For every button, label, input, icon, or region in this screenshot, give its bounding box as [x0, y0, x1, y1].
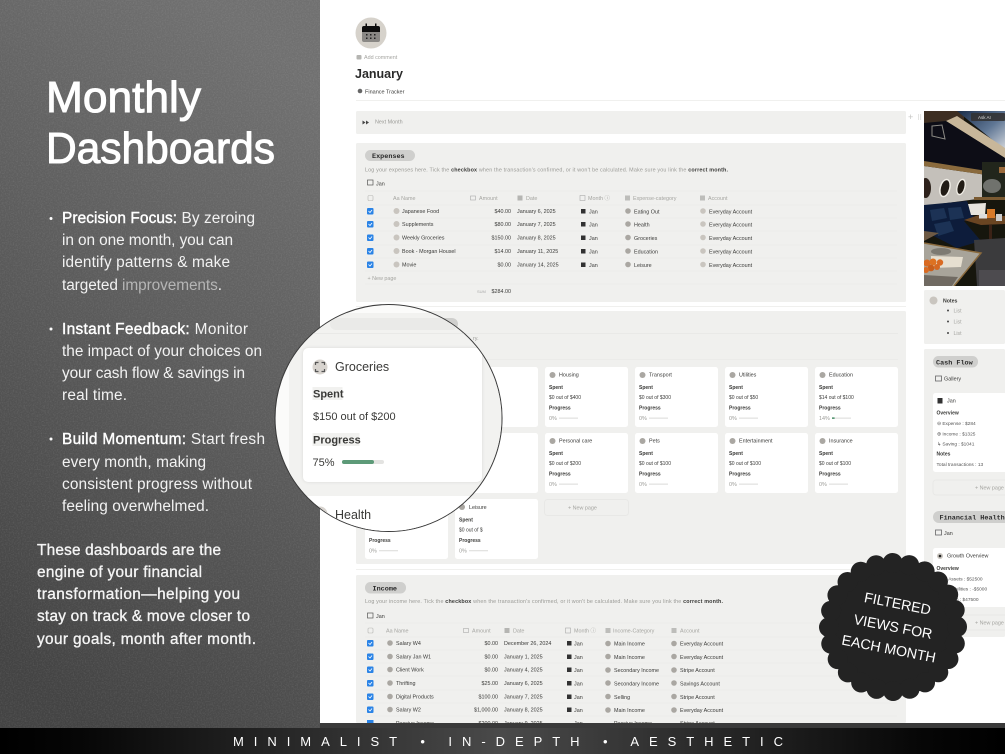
card: housing: Housing: [559, 372, 579, 378]
enlarged card: groceries: Progress: [313, 434, 361, 446]
panel: notes: [924, 290, 1005, 344]
panel: notes: Notes: [943, 298, 958, 304]
card: growth overview: Net Worth : $47500: [937, 597, 979, 603]
table header: Aa Name: [386, 628, 408, 634]
card: insurance: [815, 433, 898, 493]
section pill, mostly behind magnifier: [365, 318, 458, 330]
card: utilities: Progress: [729, 406, 751, 412]
income rows: Selling: [614, 695, 630, 701]
badge: filtered views for each month: EACH MONTH: [840, 633, 937, 667]
expense rows: Japanese Food: [402, 209, 439, 215]
expense rows: Supplements: [402, 222, 434, 228]
expense rows: Groceries: [634, 236, 658, 242]
title: [46, 73, 275, 173]
card: housing: Progress: [549, 406, 571, 412]
income rows: Secondary Income: [614, 682, 659, 688]
card: utilities: [725, 367, 808, 427]
footer banner: MINIMALIST • IN-DEPTH • AESTHETIC: [233, 734, 783, 749]
bullet: build momentum: Build Momentum: Start fresh: [62, 431, 265, 448]
enlarged card: groceries: Spent: [313, 388, 344, 400]
table header: Account: [680, 628, 700, 634]
enlarged card: groceries: $150 out of $200: [313, 411, 396, 423]
card: january cash flow: Notes: [936, 452, 951, 458]
card: personal care: Personal care: [559, 438, 592, 444]
card: leisure: 0%: [459, 548, 467, 554]
income rows: Jan: [574, 668, 583, 674]
pill: cash flow: Cash Flow: [936, 360, 974, 368]
card: pets: Spent: [639, 451, 653, 457]
expense rows: Everyday Account: [709, 210, 753, 216]
new page card: [933, 480, 1005, 495]
expense rows: Eating Out: [634, 210, 660, 216]
closing paragraph: These dashboards are the: [37, 542, 221, 559]
card: education: Education: [829, 372, 853, 378]
card: personal care: [545, 433, 628, 493]
table header: [368, 194, 728, 202]
expense rows: Jan: [589, 250, 598, 256]
income rows: January 7, 2025: [504, 694, 543, 700]
income rows: $0.00: [484, 641, 498, 647]
card: pets: $0 out of $100: [639, 461, 671, 467]
new page card: + New page: [568, 506, 597, 512]
card: pets: Progress: [639, 472, 661, 478]
new page card: [544, 500, 628, 516]
income rows: Thrifting: [396, 681, 415, 687]
panel: income: [356, 575, 906, 727]
bullet: instant feedback: the impact of your choices on: [62, 343, 262, 360]
pill: financial health: Financial Health: [940, 514, 1005, 522]
income rows: Passive Income: [614, 721, 652, 727]
enlarged card: groceries: [303, 348, 482, 482]
expense rows: Education: [634, 250, 658, 256]
title: Dashboards: [46, 124, 275, 173]
closing paragraph: [37, 542, 256, 648]
pill: expenses: [365, 150, 415, 161]
panel: notes: List: [954, 320, 962, 326]
expense rows: $14.00: [494, 249, 511, 255]
card: education: 14%: [819, 416, 830, 422]
income rows: Main Income: [614, 642, 645, 648]
income rows: December 26, 2024: [504, 641, 551, 647]
sum: SUM: [477, 289, 486, 294]
income rows: Jan: [574, 721, 583, 727]
card: education: Spent: [819, 385, 833, 391]
card: entertainment: Entertainment: [739, 438, 773, 444]
card: utilities: Utilities: [739, 372, 757, 378]
table header: Amount: [472, 628, 491, 634]
expense rows: Jan: [589, 222, 598, 228]
expense rows: Jan: [589, 210, 598, 216]
card blanks behind magnifier: [365, 367, 538, 493]
finance tracker link: Finance Tracker: [365, 90, 405, 96]
footer banner: [0, 728, 1005, 754]
income rows: January 8, 2025: [504, 708, 543, 714]
expense rows: January 11, 2025: [517, 249, 558, 255]
sum: [477, 289, 511, 295]
card: personal care: $0 out of $200: [549, 461, 581, 467]
table header: Aa Name: [393, 196, 415, 202]
card: pets: [635, 433, 718, 493]
view tab: Jan: [376, 182, 385, 188]
expense rows: Weekly Groceries: [402, 236, 445, 242]
card: pets: 0%: [639, 482, 647, 488]
card: transport: Transport: [649, 372, 672, 378]
pill: income: Income: [372, 586, 397, 594]
card: personal care: Spent: [549, 451, 563, 457]
enlarged card: groceries: Groceries: [335, 360, 389, 374]
income rows: Everyday Account: [680, 708, 724, 714]
card: insurance: 0%: [819, 482, 827, 488]
expense rows: Jan: [589, 236, 598, 242]
card: housing: Spent: [549, 385, 563, 391]
card: leisure: Leisure: [469, 505, 487, 511]
income rows: January 4, 2025: [504, 668, 543, 674]
expense rows: January 6, 2025: [517, 209, 556, 215]
gallery tab: Gallery: [944, 376, 961, 382]
card: utilities: $0 out of $50: [729, 395, 758, 401]
card: entertainment: Progress: [729, 472, 751, 478]
panel: notes: List: [954, 331, 962, 337]
closing paragraph: engine of your financial: [37, 564, 202, 581]
income rows: Passive Income: [396, 721, 434, 727]
bullet: precision focus: in on one month, you can: [62, 232, 233, 249]
panel: expenses: [356, 143, 906, 302]
card: housing: [545, 367, 628, 427]
panel: notes: List: [954, 308, 962, 314]
expense rows: Everyday Account: [709, 222, 753, 228]
bullet: precision focus: identify patterns & make: [62, 254, 230, 271]
income rows: [367, 640, 724, 727]
bullet: build momentum: feeling overwhelmed.: [62, 498, 209, 515]
income rows: Salary Jan W1: [396, 654, 431, 660]
bullet: instant feedback: your cash flow & savings in: [62, 365, 245, 382]
income rows: Client Work: [396, 668, 424, 674]
next month bar: Next Month: [375, 120, 403, 126]
closing paragraph: stay on track & move closer to: [37, 608, 250, 625]
page icon: calendar: [356, 18, 386, 48]
expense rows: Everyday Account: [709, 250, 753, 256]
next month bar: +: [908, 112, 913, 122]
card: utilities: Spent: [729, 385, 743, 391]
income rows: $200.00: [478, 721, 498, 727]
pill: cash flow: [933, 356, 978, 368]
card: entertainment: [725, 433, 808, 493]
income rows: Everyday Account: [680, 642, 724, 648]
income rows: Salary W4: [396, 641, 421, 647]
card: leisure: Spent: [459, 518, 473, 524]
card: transport: Spent: [639, 385, 653, 391]
card: leisure: [455, 499, 538, 559]
table header: Month ⓘ: [588, 194, 610, 202]
enlarged card: health: Health: [335, 508, 371, 522]
income rows: January 9, 2025: [504, 721, 543, 727]
instruction text: Log your income here. Tick the checkbox when the transaction's confirmed, or it won't be calculated. Make sure you link the correct month.: [365, 599, 724, 605]
new page card: [933, 615, 1005, 630]
expense rows: January 14, 2025: [517, 262, 559, 268]
table header: Date: [513, 628, 524, 634]
card: education: Progress: [819, 406, 841, 412]
new page card: + New page: [975, 620, 1004, 626]
badge: filtered views for each month: VIEWS FOR: [852, 612, 934, 643]
table header: Expense-category: [633, 196, 677, 202]
expense rows: Leisure: [634, 263, 652, 269]
income rows: Digital Products: [396, 694, 434, 700]
panel: budget categories: [356, 311, 906, 564]
bullet: instant feedback: real time.: [62, 387, 127, 404]
view tab: Jan: [944, 531, 953, 537]
expense rows: January 8, 2025: [517, 236, 556, 242]
card: january cash flow: ⊕ Income : $1325: [937, 432, 976, 438]
income rows: Jan: [574, 682, 583, 688]
page title: January: January: [355, 67, 403, 81]
next month bar: [356, 111, 922, 134]
card: growth overview: Total Assets : $52500: [937, 576, 983, 582]
new page row: + New page: [368, 276, 396, 282]
card: housing: 0%: [549, 416, 557, 422]
card: transport: Progress: [639, 406, 661, 412]
card: january cash flow: Overview: [936, 410, 959, 416]
badge: filtered views for each month: [824, 558, 962, 696]
expense rows: $40.00: [494, 209, 511, 215]
card: entertainment: $0 out of $100: [729, 461, 761, 467]
bullet: build momentum: consistent progress without: [62, 476, 253, 493]
income rows: Main Income: [614, 708, 645, 714]
card: insurance: Progress: [819, 472, 841, 478]
expense rows: $0.00: [498, 262, 511, 268]
table header: Income-Category: [613, 628, 655, 634]
card: january cash flow: ⊖ Expense : $284: [937, 421, 976, 427]
card: personal care: Progress: [549, 472, 571, 478]
badge: filtered views for each month: FILTERED: [863, 590, 932, 619]
pill: expenses: Expenses: [372, 153, 405, 161]
gallery tab: [936, 376, 961, 382]
card: pets: Pets: [649, 438, 660, 444]
instruction text: Log your expenses here. Tick the checkbox when the transaction's confirmed, or it won't be calculated. Make sure you link the correct month.: [365, 168, 728, 174]
card: health: Progress: [369, 538, 391, 544]
card: transport: $0 out of $300: [639, 395, 671, 401]
income rows: $25.00: [482, 681, 498, 687]
title: Monthly: [46, 73, 201, 122]
table header: [368, 626, 700, 634]
expense rows: Everyday Account: [709, 236, 753, 242]
card: january cash flow: Jan: [947, 398, 956, 404]
expense rows: Book - Morgan Housel: [402, 249, 456, 255]
table header: Month ⓘ: [574, 626, 596, 634]
card: education: [815, 367, 898, 427]
enlarged card: groceries: 75%: [312, 457, 335, 469]
income rows: $0.00: [484, 654, 498, 660]
expense rows: [367, 208, 753, 269]
expense rows: $80.00: [494, 222, 511, 228]
card: january cash flow: Total transactions : 13: [936, 462, 983, 468]
section description tail: ry.: [473, 336, 479, 342]
card: education: $14 out of $100: [819, 395, 854, 401]
closing paragraph: your goals, month after month.: [37, 631, 256, 648]
card: health: [365, 499, 448, 559]
card: insurance: Insurance: [829, 438, 853, 444]
income rows: January 6, 2025: [504, 681, 543, 687]
income rows: Jan: [574, 655, 583, 661]
income rows: January 1, 2025: [504, 654, 543, 660]
bullet: instant feedback: Instant Feedback: Monitor: [62, 321, 248, 338]
card: growth overview: Growth Overview: [947, 554, 988, 560]
income rows: Salary W2: [396, 708, 421, 714]
view tab: [368, 613, 385, 620]
income rows: Savings Account: [680, 682, 720, 688]
bullet: precision focus: targeted improvements.: [62, 277, 222, 294]
sum: $284.00: [492, 289, 511, 295]
income rows: $0.00: [484, 668, 498, 674]
card: growth overview: [933, 548, 1005, 607]
card: leisure: $0 out of $: [459, 528, 483, 534]
expense rows: January 7, 2025: [517, 222, 556, 228]
bullet: build momentum: [50, 431, 265, 515]
bullet: precision focus: [50, 210, 255, 294]
new page card: + New page: [975, 486, 1004, 492]
bullet: precision focus: Precision Focus: By zeroing: [62, 210, 255, 227]
magnifier callout: [274, 304, 503, 532]
card: personal care: 0%: [549, 482, 557, 488]
card: housing: $0 out of $400: [549, 395, 581, 401]
income rows: $1,000.00: [474, 708, 498, 714]
card: health: 0%: [369, 548, 377, 554]
enlarged card: health: [318, 506, 370, 519]
card: utilities: 0%: [729, 416, 737, 422]
closing paragraph: transformation—helping you: [37, 586, 240, 603]
card: transport: 0%: [639, 416, 647, 422]
card: growth overview: Overview: [936, 566, 959, 572]
bullet: build momentum: every month, making: [62, 454, 206, 471]
card: january cash flow: ↳ Saving : $1041: [937, 442, 975, 448]
card: leisure: Progress: [459, 538, 481, 544]
card: insurance: Spent: [819, 451, 833, 457]
income rows: Stripe Account: [680, 695, 715, 701]
pill: financial health: [933, 511, 1005, 523]
photo: jet interior: [920, 111, 1005, 286]
table header: Amount: [479, 196, 498, 202]
income rows: Jan: [574, 695, 583, 701]
add comment: Add comment: [364, 55, 398, 61]
next month bar: ⠿: [917, 114, 922, 122]
income rows: Stripe Account: [680, 721, 715, 727]
table header: Account: [708, 196, 728, 202]
income rows: Main Income: [614, 655, 645, 661]
card: entertainment: Spent: [729, 451, 743, 457]
view tab: Jan: [376, 614, 385, 620]
table header: Date: [526, 196, 537, 202]
income rows: Jan: [574, 708, 583, 714]
card: insurance: $0 out of $100: [819, 461, 851, 467]
card: entertainment: 0%: [729, 482, 737, 488]
expense rows: Health: [634, 222, 650, 228]
bullet list: [50, 210, 265, 515]
view tab: [936, 530, 953, 537]
card: january cash flow: [933, 393, 1005, 472]
income rows: Stripe Account: [680, 668, 715, 674]
income rows: $100.00: [478, 694, 498, 700]
income rows: Jan: [574, 642, 583, 648]
income rows: Everyday Account: [680, 655, 724, 661]
photo: jet interior: Ask AI: [978, 115, 991, 120]
expense rows: Movie: [402, 262, 416, 268]
bullet: instant feedback: [50, 321, 262, 404]
income rows: Secondary Income: [614, 668, 659, 674]
pill: income: [365, 582, 406, 594]
expense rows: Jan: [589, 263, 598, 269]
expense rows: $150.00: [492, 236, 511, 242]
card: transport: [635, 367, 718, 427]
panel: cash flow and financial health: [924, 349, 1005, 637]
expense rows: Everyday Account: [709, 263, 753, 269]
card: growth overview: Total Liabilities : -$5000: [937, 586, 987, 592]
dashboard page: [320, 0, 1005, 727]
view tab: [368, 180, 385, 188]
